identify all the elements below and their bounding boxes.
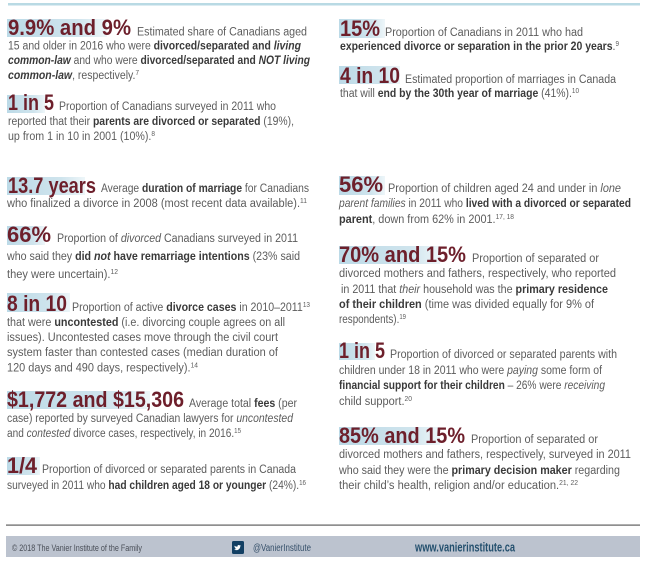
description: in 2011 that their household was the primary residence xyxy=(341,284,608,296)
description: 15 and older in 2016 who were divorced/separated and living xyxy=(8,40,301,52)
stat number: 1 in 5 xyxy=(339,338,385,363)
stat number: $1,772 and $15,306 xyxy=(7,387,184,412)
description: experienced divorce or separation in the prior 20 years. xyxy=(340,41,640,53)
description: respondents). xyxy=(339,314,409,326)
description: reported that their parents are divorced or separated (19%), xyxy=(8,116,294,128)
stat: 1 in 5 parents xyxy=(339,338,617,408)
stat number: 9.9% and 9% xyxy=(8,15,131,40)
stat: 70% and 15% xyxy=(339,242,616,326)
description xyxy=(6,183,309,210)
description: 13 xyxy=(303,302,310,309)
description: Proportion of children aged 24 and under in lone xyxy=(388,183,621,195)
description: case) reported by surveyed Canadian lawyers for uncontested xyxy=(7,413,294,425)
twitter handle: @VanierInstitute xyxy=(253,543,311,554)
stat: 13.7 years xyxy=(6,173,309,210)
description: that will end by the 30th year of marriage (41%). xyxy=(340,88,575,100)
stat number: 1/4 xyxy=(7,453,38,478)
description xyxy=(8,26,310,82)
copyright: © 2018 The Vanier Institute of the Family xyxy=(12,543,142,554)
description xyxy=(339,349,617,408)
description: and contested divorce cases, respectively, in 2016. xyxy=(7,428,257,440)
stat number: 4 in 10 xyxy=(340,63,400,88)
stat number: 70% and 15% xyxy=(339,242,466,267)
description: who said they were the primary decision maker regarding xyxy=(338,465,620,477)
description xyxy=(340,27,619,53)
stat number: 56% xyxy=(339,172,383,197)
description: 8 xyxy=(151,131,155,138)
description: Proportion of divorced or separated parents with xyxy=(390,349,617,361)
description: their child’s health, religion and/or education. xyxy=(339,480,566,492)
description: system faster than contested cases (median duration of xyxy=(7,347,279,359)
stat: 8 in 10 xyxy=(7,291,310,374)
description: Estimated proportion of marriages in Canada xyxy=(405,74,617,86)
description: 10 xyxy=(572,88,579,95)
description xyxy=(340,74,617,100)
description: who finalized a divorce in 2008 (most recent data available). xyxy=(7,198,313,210)
stat: 56% xyxy=(338,172,631,226)
description: parent families in 2011 who lived with a divorced or separated xyxy=(338,198,631,210)
description xyxy=(7,464,306,492)
stat: 1/4 xyxy=(7,453,306,492)
description xyxy=(8,101,294,143)
description xyxy=(338,434,631,492)
description: that were uncontested (i.e. divorcing couple agrees on all xyxy=(7,317,285,329)
description: child support. xyxy=(339,396,407,408)
description: surveyed in 2011 who had children aged 18 or younger (24%). xyxy=(7,480,303,492)
description: 19 xyxy=(399,314,406,321)
description: 20 xyxy=(405,396,412,403)
description xyxy=(7,302,310,374)
description: Proportion of Canadians surveyed in 2011 who xyxy=(59,101,276,113)
description: who said they did not have remarriage intentions (23% said xyxy=(6,251,300,263)
description xyxy=(338,183,631,226)
stat: 4 in 10 xyxy=(339,63,617,100)
stat number: 66% xyxy=(7,222,51,247)
description: up from 1 in 10 in 2001 (10%). xyxy=(8,131,163,143)
description: they were uncertain). xyxy=(7,269,114,281)
description: Estimated share of Canadians aged xyxy=(137,26,307,38)
description: divorced mothers and fathers, respectively, surveyed in 2011 xyxy=(339,449,631,461)
description xyxy=(339,253,616,326)
description: of their children (time was divided equally for 9% of xyxy=(339,299,595,311)
stat: 15% xyxy=(339,16,619,53)
description xyxy=(7,398,297,440)
footer band xyxy=(6,536,640,557)
description: divorced mothers and fathers, respectively, who reported xyxy=(339,268,616,280)
stat number: 15% xyxy=(340,16,380,41)
stat: 9.9% and 9% xyxy=(7,15,310,82)
description: Average total fees (per xyxy=(189,398,297,410)
stat: 85% and 15% xyxy=(338,423,631,492)
icon: twitter xyxy=(232,541,244,554)
description: 9 xyxy=(615,41,619,48)
description: Average duration of marriage for Canadians xyxy=(101,183,309,195)
description: Proportion of divorced Canadians surveyed in 2011 xyxy=(57,233,298,245)
description: issues). Uncontested cases move through the civil court xyxy=(7,332,279,344)
stat: $1,772 and $15,306 xyxy=(7,387,297,440)
description: 15 xyxy=(234,428,241,435)
description: children under 18 in 2011 who were paying some form of xyxy=(339,365,603,377)
stat number: 8 in 10 xyxy=(7,291,67,316)
description xyxy=(6,233,300,281)
description: parent, down from 62% in 2001. xyxy=(339,214,503,226)
website: www.vanierinstitute.ca xyxy=(414,540,516,554)
description: Proportion of separated or xyxy=(471,434,598,446)
description: Proportion of Canadians in 2011 who had xyxy=(385,27,583,39)
description: Proportion of separated or xyxy=(472,253,599,265)
stat: 66% xyxy=(6,222,300,281)
stat number: 1 in 5 xyxy=(8,90,54,115)
stat number: 85% and 15% xyxy=(339,423,465,448)
description: 16 xyxy=(299,480,306,487)
description: 21, 22 xyxy=(559,480,578,487)
description: 17, 18 xyxy=(496,214,514,221)
description: 120 days and 490 days, respectively). xyxy=(7,362,200,374)
description: financial support for their children – 26% were receiving xyxy=(339,380,606,392)
stat: 1 in 5 xyxy=(7,90,294,143)
description: common-law, respectively. xyxy=(8,70,142,82)
description: 12 xyxy=(110,269,118,276)
description: Proportion of active divorce cases in 2010–2011 xyxy=(72,302,308,314)
description: 14 xyxy=(191,362,198,370)
description: 11 xyxy=(300,198,307,205)
stat number: 13.7 years xyxy=(8,173,96,198)
description: common-law and who were divorced/separated and NOT living xyxy=(8,55,310,67)
description: Proportion of divorced or separated parents in Canada xyxy=(42,464,297,476)
description: 7 xyxy=(135,70,139,77)
